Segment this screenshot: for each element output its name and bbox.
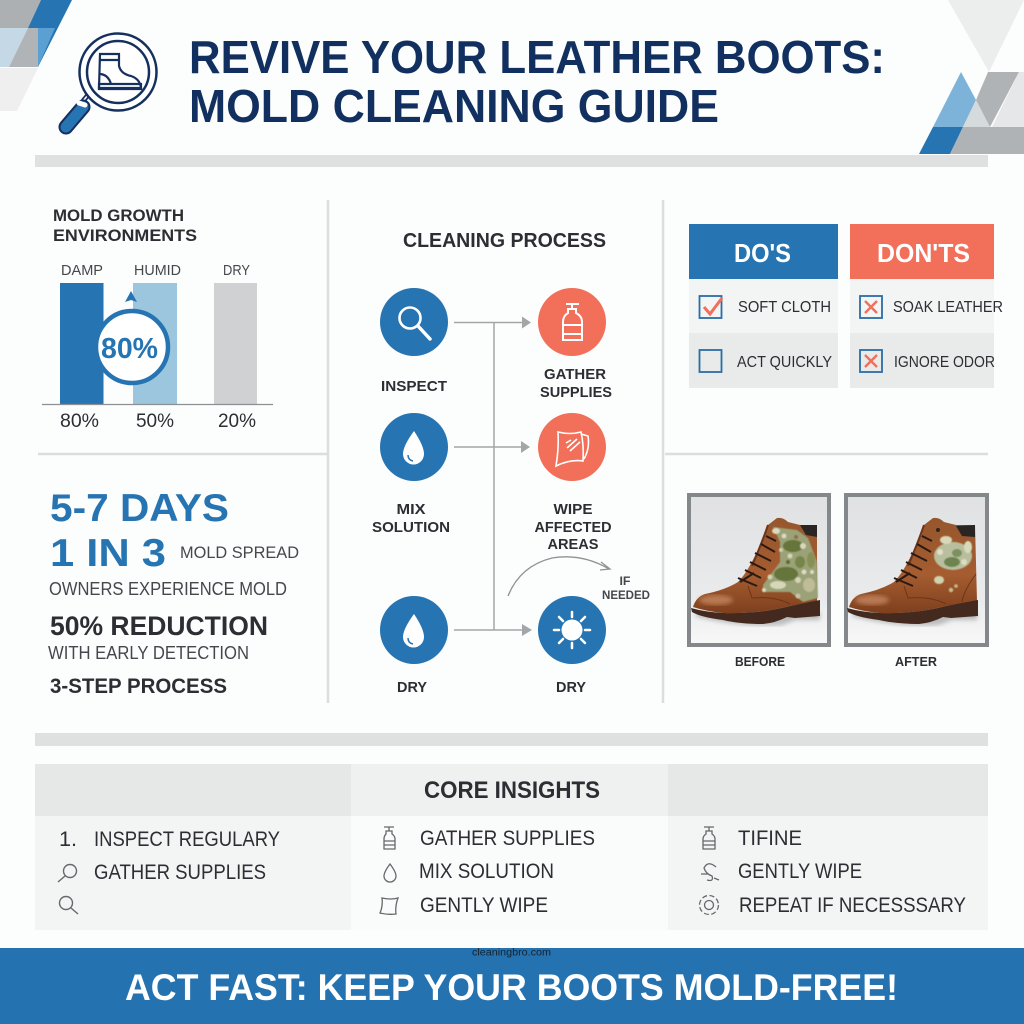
bar: damp bbox=[60, 263, 104, 432]
don'ts header bbox=[850, 224, 994, 279]
panel: key statistics: MOLD SPREAD bbox=[180, 543, 299, 562]
boot bbox=[691, 518, 820, 624]
panel: key statistics: 5-7 DAYS bbox=[50, 487, 229, 530]
step: gather supplies bbox=[538, 288, 612, 401]
footer banner bbox=[0, 948, 1024, 1024]
bar: humid: HUMID bbox=[134, 263, 181, 279]
icon: magnifier with boot bbox=[66, 34, 156, 127]
panel: key statistics: 50% REDUCTION bbox=[50, 611, 268, 641]
step: inspect bbox=[380, 288, 448, 395]
arrow: if needed loop: IF bbox=[620, 574, 630, 588]
title: REVIVE YOUR LEATHER BOOTS: bbox=[189, 31, 885, 83]
column: left insights: GATHER SUPPLIES bbox=[94, 861, 266, 884]
label: after: AFTER bbox=[895, 654, 938, 669]
bar: damp: 80% bbox=[60, 411, 99, 432]
row: soak leather: SOAK LEATHER bbox=[893, 299, 1003, 316]
label: before: BEFORE bbox=[735, 654, 785, 669]
step: dry drop bbox=[380, 596, 448, 696]
column: middle insights: GENTLY WIPE bbox=[420, 894, 548, 917]
bar: dry: 20% bbox=[218, 411, 256, 432]
title: MOLD CLEANING GUIDE bbox=[189, 80, 719, 132]
footer banner: ACT FAST: KEEP YOUR BOOTS MOLD-FREE! bbox=[125, 967, 898, 1008]
panel: key statistics bbox=[48, 487, 299, 698]
decoration: top-right geometric shapes bbox=[919, 0, 1024, 154]
step: dry sun bbox=[538, 596, 606, 696]
bar: dry bbox=[214, 263, 257, 432]
column: right insights bbox=[700, 827, 966, 917]
row: soft cloth bbox=[689, 279, 838, 333]
arrow: if needed loop bbox=[508, 557, 650, 602]
step: mix solution bbox=[372, 413, 450, 536]
step: dry sun: DRY bbox=[556, 679, 586, 696]
watermark: cleaningbro.com bbox=[472, 948, 551, 958]
panel: key statistics: WITH EARLY DETECTION bbox=[48, 643, 249, 663]
decoration: top-left geometric shapes bbox=[0, 0, 72, 111]
column: middle insights bbox=[380, 827, 595, 917]
step: wipe affected areas: AREAS bbox=[548, 536, 598, 553]
column: middle insights: GATHER SUPPLIES bbox=[420, 827, 595, 850]
panel: don'ts bbox=[850, 224, 1003, 388]
callout: 80% circle bbox=[96, 291, 168, 383]
heading: core insights: CORE INSIGHTS bbox=[424, 777, 600, 804]
photo: before bbox=[689, 495, 829, 669]
panel: mold growth environments chart bbox=[42, 206, 273, 432]
do's header: DO'S bbox=[734, 238, 791, 268]
step: mix solution: SOLUTION bbox=[372, 519, 450, 536]
bar: dry: DRY bbox=[223, 263, 250, 279]
arrow: if needed loop: NEEDED bbox=[602, 588, 650, 602]
heading: cleaning process: CLEANING PROCESS bbox=[403, 230, 606, 252]
column: left insights: 1. bbox=[59, 828, 77, 851]
row: act quickly bbox=[689, 333, 838, 388]
step: inspect: INSPECT bbox=[381, 378, 447, 395]
step: wipe affected areas bbox=[534, 413, 612, 553]
don'ts header: DON'TS bbox=[877, 238, 970, 268]
do's header bbox=[689, 224, 838, 279]
chart heading: MOLD GROWTH bbox=[53, 206, 184, 225]
row: act quickly: ACT QUICKLY bbox=[737, 354, 832, 371]
column: right insights: GENTLY WIPE bbox=[738, 860, 862, 883]
bar: humid bbox=[133, 263, 181, 432]
step: dry drop: DRY bbox=[397, 679, 427, 696]
row: soak leather bbox=[850, 279, 1003, 333]
panel: do's bbox=[689, 224, 838, 388]
row: ignore odor: IGNORE ODOR bbox=[894, 354, 995, 371]
photo: after bbox=[846, 495, 987, 669]
column: middle insights: MIX SOLUTION bbox=[419, 860, 554, 883]
panel: key statistics: 3-STEP PROCESS bbox=[50, 675, 227, 698]
callout: 80% circle: 80% bbox=[101, 333, 158, 365]
bar: humid: 50% bbox=[136, 411, 174, 432]
column: right insights: TIFINE bbox=[738, 827, 802, 850]
step: gather supplies: SUPPLIES bbox=[540, 384, 612, 401]
arrows: process connectors bbox=[454, 316, 532, 636]
column: left insights: INSPECT REGULARY bbox=[94, 828, 280, 851]
chart heading bbox=[53, 206, 197, 245]
panel: key statistics: OWNERS EXPERIENCE MOLD bbox=[49, 579, 287, 599]
step: mix solution: MIX bbox=[396, 501, 426, 518]
title bbox=[189, 31, 885, 132]
step: wipe affected areas: WIPE bbox=[554, 501, 592, 518]
panel: cleaning process bbox=[372, 230, 650, 696]
column: right insights: REPEAT IF NECESSSARY bbox=[739, 894, 966, 917]
panel: key statistics: 1 IN 3 bbox=[50, 532, 166, 575]
boot bbox=[847, 518, 978, 624]
column: left insights bbox=[58, 828, 280, 914]
step: gather supplies: GATHER bbox=[544, 366, 606, 383]
chart heading: ENVIRONMENTS bbox=[53, 226, 197, 245]
bar: damp: DAMP bbox=[61, 263, 103, 279]
row: ignore odor bbox=[850, 333, 995, 388]
step: wipe affected areas: AFFECTED bbox=[534, 519, 612, 536]
panel: core insights bbox=[35, 764, 988, 930]
row: soft cloth: SOFT CLOTH bbox=[738, 299, 831, 316]
